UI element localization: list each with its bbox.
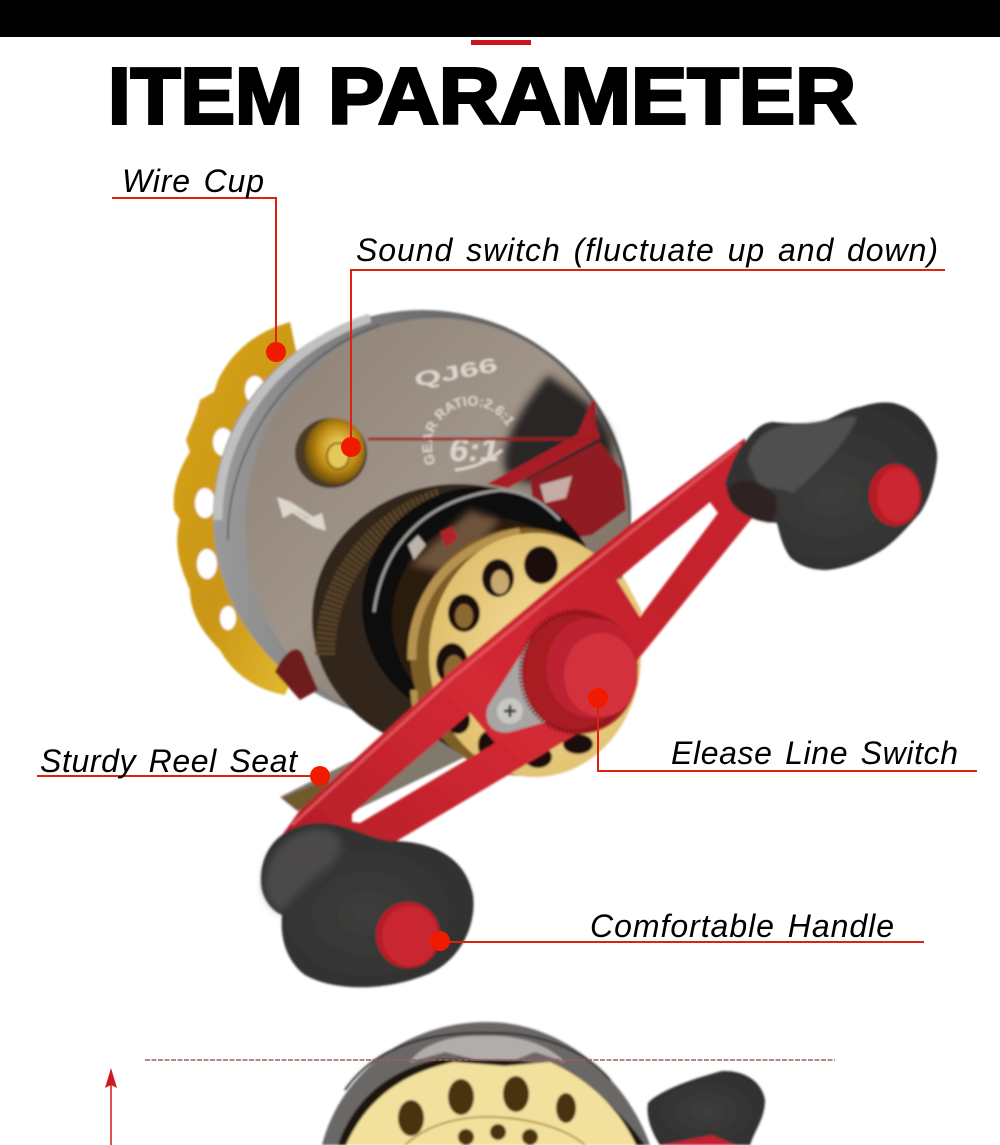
engraved markings <box>276 354 515 532</box>
gold spool face <box>338 1059 645 1145</box>
gold back rim <box>174 322 340 695</box>
inner drum <box>312 484 604 752</box>
callout: Comfortable Handle <box>430 908 924 951</box>
callout: Wire Cup: Wire Cup <box>122 163 264 199</box>
model mark: QJ66 <box>413 354 499 392</box>
sound switch gold post <box>295 418 367 488</box>
gold sliver in window <box>617 578 642 617</box>
callout: Elease Line Switch <box>588 688 977 771</box>
reel side band <box>213 310 631 722</box>
spool holes <box>436 546 593 768</box>
dimension arrow <box>105 1068 117 1145</box>
red crank arm <box>280 438 752 842</box>
bottom handle grip <box>261 823 474 987</box>
callout: Sound switch <box>341 232 945 457</box>
title: PARAMETER <box>328 52 856 140</box>
top black band <box>0 0 1000 37</box>
title <box>108 52 856 140</box>
ratio number: 6:1 <box>449 432 499 468</box>
handle <box>648 1071 765 1145</box>
dashed height guide <box>145 1059 835 1061</box>
release line knob <box>521 610 638 734</box>
callout: Elease Line Switch: Elease Line Switch <box>671 735 958 771</box>
red accent bar <box>471 40 531 45</box>
dark-red reflected guide line <box>368 401 595 440</box>
reel dome <box>322 1022 650 1145</box>
grey knob plate <box>487 640 570 733</box>
second reel view, cropped at the bottom <box>322 1022 765 1145</box>
callout: Sound switch: Sound switch (fluctuate up and down) <box>356 232 938 268</box>
callout: Comfortable Handle: Comfortable Handle <box>590 908 894 944</box>
gear ratio: GEAR RATIO:2.6:1 <box>421 394 515 466</box>
direction arrows <box>277 497 326 531</box>
callout: Sturdy Reel Seat: Sturdy Reel Seat <box>40 743 298 779</box>
callout: Wire Cup <box>112 163 286 362</box>
top handle grip <box>725 402 937 570</box>
crank arm highlights <box>292 445 740 825</box>
main reel product photo <box>172 308 939 989</box>
reel face plate <box>245 318 629 730</box>
title: ITEM <box>108 52 303 140</box>
reel seat <box>280 735 465 811</box>
spool holes <box>398 1076 576 1145</box>
gold spool <box>410 528 641 777</box>
